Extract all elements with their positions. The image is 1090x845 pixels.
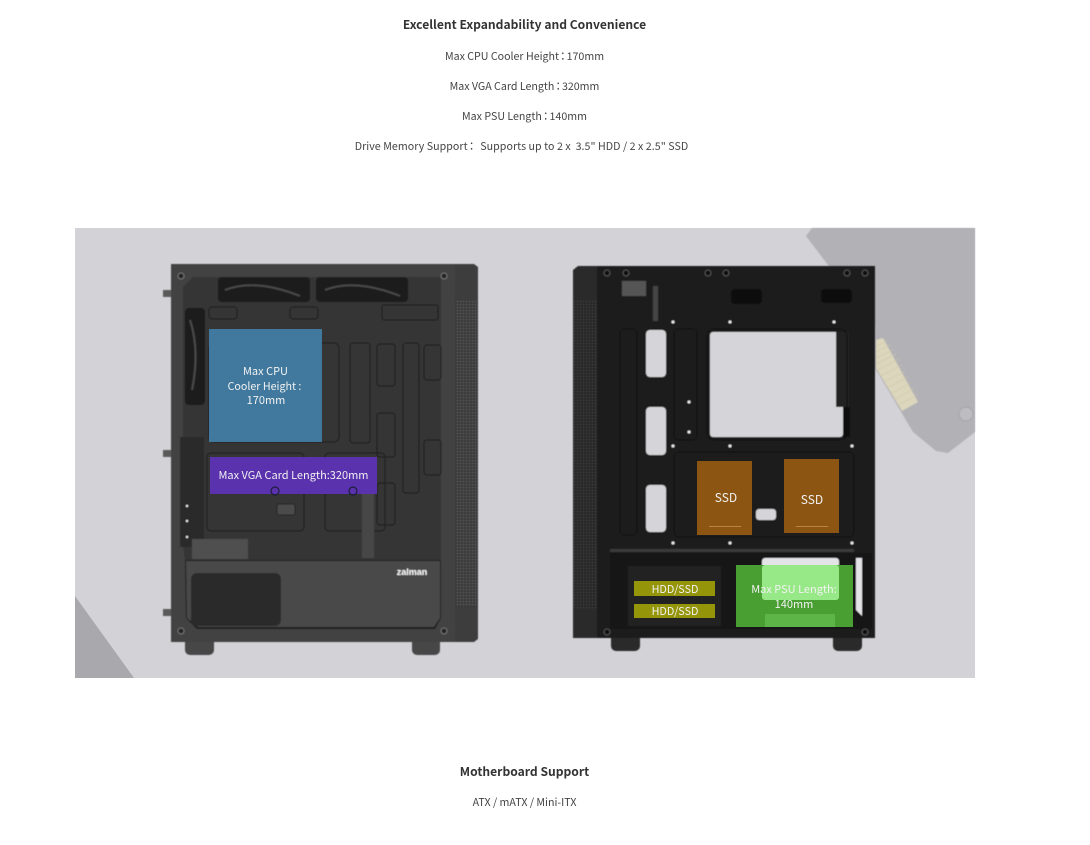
callout: CPU cooler height: Cooler Height : (228, 379, 301, 394)
callout: SSD left (697, 461, 752, 535)
text: VGA card length: Max VGA Card Length：320mm (450, 79, 599, 94)
callout: VGA card length (210, 457, 377, 494)
heading: expandability: Excellent Expandability and Convenience (403, 16, 646, 33)
text: PSU length: Max PSU Length：140mm (462, 109, 587, 124)
text: drive memory support: Drive Memory Support： Supports up to 2 x 3.5" HDD / 2 x 2.5" SSD (355, 139, 688, 154)
callout: CPU cooler height: 170mm (247, 392, 285, 408)
callout: HDD/SSD upper: HDD/SSD (652, 581, 698, 597)
front case artwork (163, 264, 478, 655)
text: motherboard formats: ATX / mATX / Mini-ITX (473, 795, 576, 810)
callout: SSD left: SSD (715, 489, 737, 506)
rear case artwork (573, 266, 875, 651)
callout: PSU length: Max PSU Length: (751, 581, 837, 597)
callout: HDD/SSD lower: HDD/SSD (652, 603, 698, 619)
front case artwork: zalman (397, 567, 427, 577)
callout: CPU cooler height (209, 329, 322, 442)
case: front view (163, 264, 478, 655)
decorative triangle (75, 596, 134, 678)
heading: motherboard support: Motherboard Support (460, 763, 589, 780)
callout: CPU cooler height: Max CPU (243, 363, 288, 379)
callout: SSD right (784, 459, 839, 533)
callout: SSD right: SSD (801, 491, 823, 508)
VGA mounting screws (271, 487, 357, 495)
illustration: SSD behind the case (806, 228, 975, 453)
case: rear view (573, 266, 875, 651)
callout: PSU length: 140mm (775, 596, 813, 612)
callout: HDD/SSD lower (634, 603, 715, 619)
callout: VGA card length: Max VGA Card Length:320mm (218, 467, 369, 483)
callout: PSU length (736, 565, 853, 627)
text: CPU cooler height: Max CPU Cooler Height：170mm (445, 49, 604, 64)
panel: background (75, 228, 975, 678)
callout: HDD/SSD upper (634, 581, 715, 597)
